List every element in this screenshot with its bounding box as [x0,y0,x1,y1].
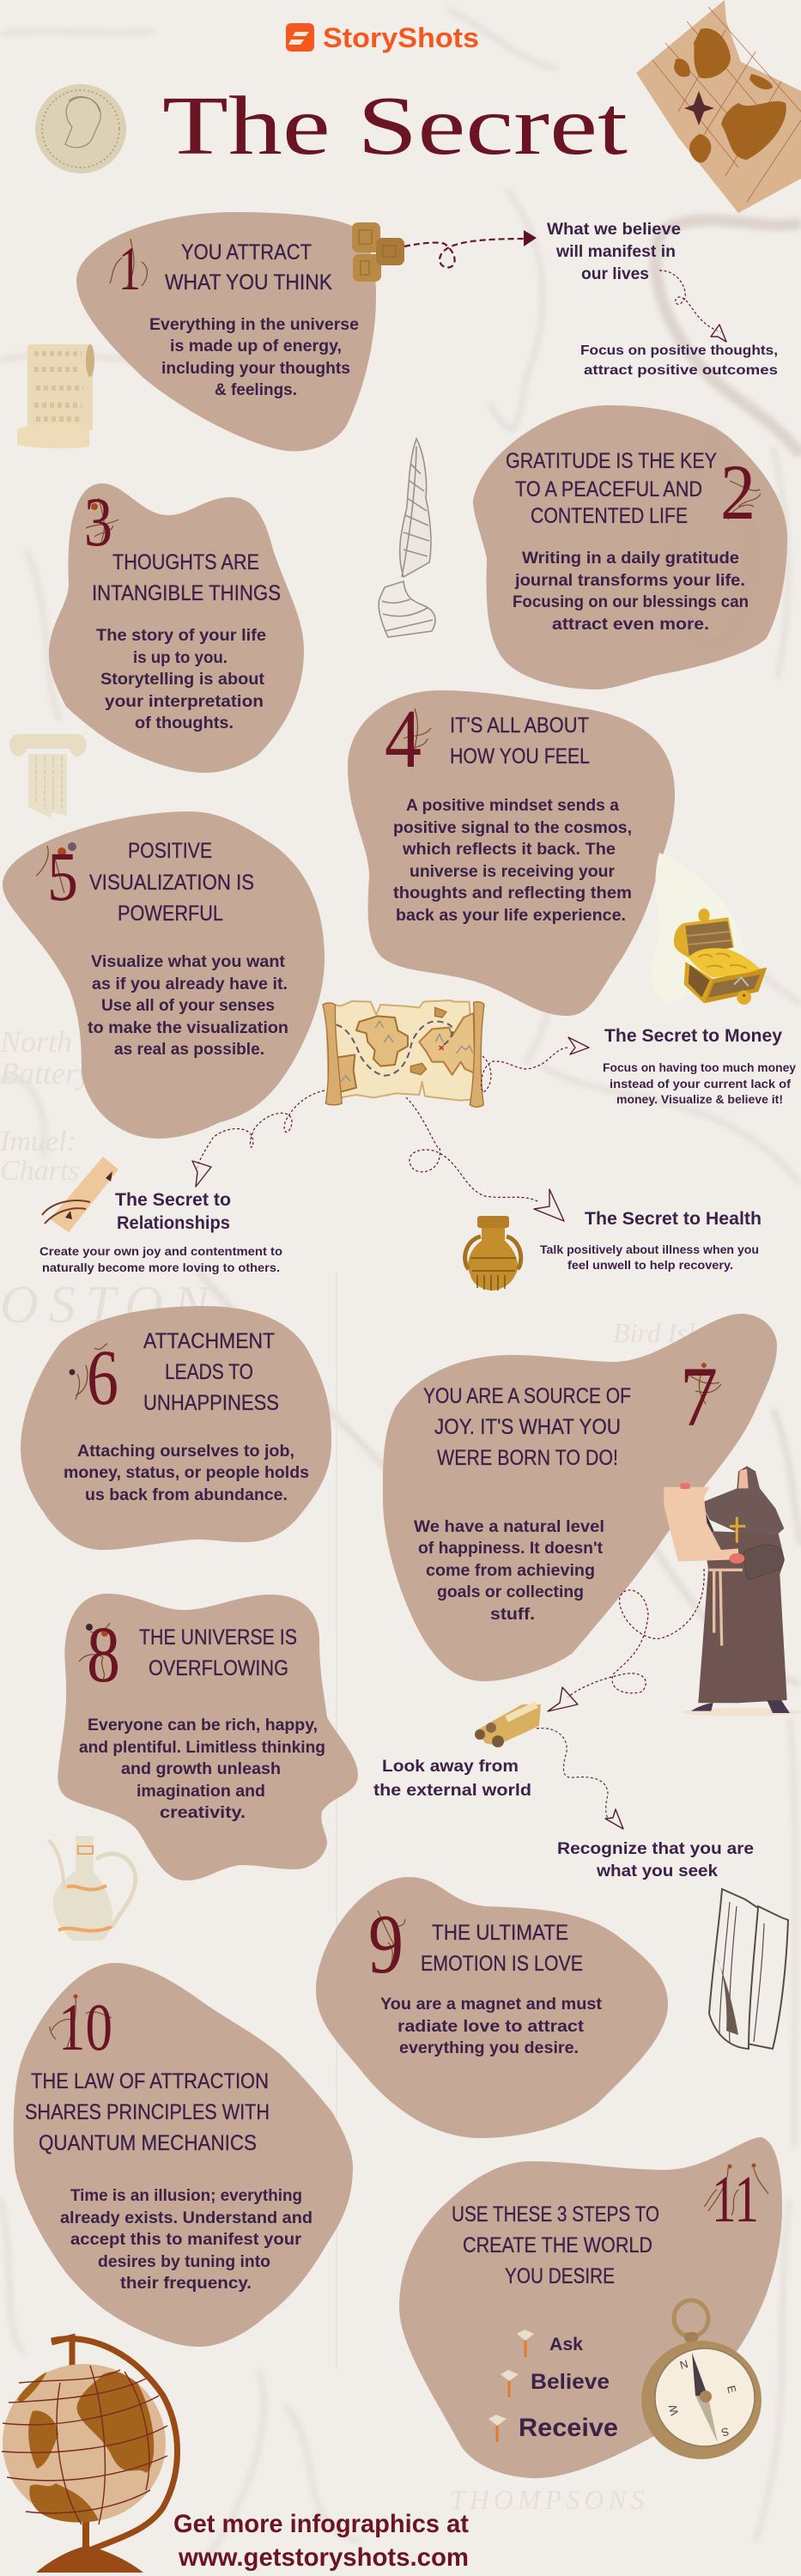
number 8: 8 [87,1611,120,1699]
step: believe: Believe [531,2370,610,2394]
callout: the secret to money: instead of your current lack of [610,1077,791,1091]
body 1: is made up of energy, [170,337,342,355]
body 1: including your thoughts [161,360,350,378]
number 10: 10 [58,1990,112,2064]
callout: the secret to relationships: Relationships [117,1213,230,1233]
heading 2 [506,449,717,528]
body 5: Visualize what you want [91,953,286,971]
body 3: Storytelling is about [100,671,265,689]
callout: what we believe: will manifest in [555,243,676,261]
heading 5: POWERFUL [118,902,223,926]
body 9: everything you desire. [399,2039,579,2057]
number 1: 1 [118,234,141,303]
body 10: accept this to manifest your [70,2231,302,2249]
text: Imuel: [0,1126,76,1157]
step: ask [517,2330,583,2357]
body 3: your interpretation [105,693,264,711]
heading 7: JOY. IT'S WHAT YOU [434,1415,621,1439]
number 5: 5 [47,837,78,915]
blob 9 [316,1877,668,2138]
icon: quill and inkpot [379,439,435,637]
callout: what we believe: What we believe [547,221,681,239]
heading 4 [450,714,590,769]
icon: broken column [9,734,87,818]
body 7: stuff. [490,1606,535,1624]
number 6: 6 [87,1334,118,1421]
heading 5: VISUALIZATION IS [89,871,254,895]
callout: the secret to relationships [39,1190,282,1274]
body 8: Everyone can be rich, happy, [88,1716,318,1735]
heading 9 [421,1921,583,1976]
body 5: as if you already have it. [92,975,288,993]
arrow: monk to scrolls [548,1569,704,1711]
body 10: desires by tuning into [98,2253,270,2271]
body 2: Focusing on our blessings can [513,593,749,611]
panel 4: it's all about how you feel [348,690,675,1016]
icon: old world map [636,0,801,213]
body 10: already exists. Understand and [60,2209,313,2227]
body 2: journal transforms your life. [514,572,745,590]
heading 11: CREATE THE WORLD [463,2233,652,2257]
body 3: The story of your life [96,627,266,645]
footer call to action: www.getstoryshots.com [178,2543,469,2572]
callout: the secret to relationships: Create your own joy and contentment to [39,1244,282,1258]
callout: recognize [557,1839,754,1880]
number 4: 4 [385,693,422,786]
body 10: Time is an illusion; everything [70,2187,302,2205]
arrow: scrolls to recognize [537,1728,623,1829]
heading 6: LEADS TO [165,1360,253,1384]
heading 9: THE ULTIMATE [432,1921,568,1945]
body 8 [79,1716,325,1822]
icon: compass [641,2300,762,2459]
callout: focus on positive thoughts: Focus on positive thoughts, [580,343,778,358]
icon: compass: N [678,2357,689,2372]
arrow: belief to focus [659,270,726,342]
heading 7 [423,1384,631,1470]
panel 11: three steps [399,2137,782,2478]
body 4: A positive mindset sends a [406,797,619,815]
body 6: Attaching ourselves to job, [77,1443,294,1461]
callout: focus on positive thoughts: attract positive outcomes [584,363,778,378]
callout: look away [373,1757,531,1800]
heading 6: UNHAPPINESS [143,1391,279,1415]
blob 5 [3,811,325,1139]
text: Bird Island [613,1317,737,1348]
callout: the secret to health: feel unwell to help recovery. [567,1258,733,1272]
icon: compass: W [665,2403,681,2417]
body 3 [96,627,266,732]
icon: ceramic jug [48,1836,136,1941]
body 7: come from achieving [426,1562,595,1580]
callout: what we believe [547,221,681,283]
body 2 [513,550,749,634]
panel 1: you attract what you think [76,212,376,452]
body 7: goals or collecting [437,1583,584,1601]
callout: the secret to relationships: The Secret to [115,1190,231,1210]
arrow: map to health [406,1097,564,1221]
callout: the secret to health: Talk positively about illness when you [540,1242,759,1256]
blob 2 [473,405,787,690]
panel 2: gratitude [473,405,787,690]
heading 5 [89,839,254,926]
blob 8 [58,1594,358,1880]
body 7: of happiness. It doesn't [418,1540,604,1558]
figure: monk with scroll [664,1466,801,1716]
body 4: universe is receiving your [410,863,616,881]
text: THOMPSONS [450,2484,649,2515]
text: Battery [0,1056,91,1091]
footer call to action [173,2510,469,2572]
text: Charts [0,1155,80,1187]
body 1 [149,316,359,399]
footer call to action: Get more infographics at [173,2510,469,2538]
panel 5: positive visualization [3,811,325,1139]
heading 2: CONTENTED LIFE [531,504,688,528]
blob 6 [21,1306,331,1550]
number 3: 3 [84,483,112,561]
icon: books [709,1889,788,2049]
heading 9: EMOTION IS LOVE [421,1952,583,1976]
heading 11 [452,2202,659,2288]
callout: the secret to money [603,1026,796,1106]
body 1: & feelings. [215,381,297,399]
callout: what we believe: our lives [581,265,649,283]
body 5: to make the visualization [88,1019,288,1037]
icon: urn [465,1216,521,1291]
body 6: money, status, or people holds [64,1464,309,1482]
body 8: imagination and [137,1783,265,1801]
step: believe [501,2370,610,2397]
body 8: and growth unleash [121,1760,281,1778]
callout: the secret to relationships: naturally become more loving to others. [42,1261,280,1274]
heading 10 [25,2069,270,2155]
step: ask: Ask [549,2335,583,2354]
body 4: positive signal to the cosmos, [393,819,632,837]
heading 2: TO A PEACEFUL AND [515,477,702,501]
callout: the secret to money: The Secret to Money [604,1026,782,1046]
body 8: creativity. [160,1804,246,1822]
heading 5: POSITIVE [128,839,212,863]
body 5: as real as possible. [114,1041,264,1059]
panel 7: source of joy [383,1314,777,1681]
callout: focus on positive thoughts [580,343,778,378]
body 4 [393,797,632,925]
panel 6: attachment [21,1306,331,1550]
heading 7: YOU ARE A SOURCE OF [423,1384,631,1408]
heading 6 [143,1329,279,1415]
text: OSTON [0,1276,219,1334]
icon: rolled parchment [42,1157,118,1232]
number 5 [36,837,78,915]
title: The Secret [162,80,628,172]
icon: globe [2,2337,177,2573]
blob 7 [383,1314,777,1681]
icon: carved tablets [352,222,404,282]
panel 8: universe overflowing [58,1594,358,1880]
callout: the secret to health: The Secret to Health [585,1209,762,1229]
body 4: thoughts and reflecting them [393,884,632,902]
heading 1: WHAT YOU THINK [165,270,332,295]
heading 3: THOUGHTS ARE [112,550,259,574]
number 9: 9 [368,1898,404,1991]
icon: coin [35,84,126,173]
heading 1: YOU ATTRACT [181,240,312,264]
body 5 [88,953,288,1059]
heading 6: ATTACHMENT [143,1329,275,1353]
heading 3 [92,550,281,605]
panel 10: law of attraction [14,1963,353,2347]
body 10: their frequency. [120,2275,252,2293]
number 6 [69,1334,118,1421]
heading 8 [139,1625,297,1680]
icon: treasure chest [652,853,767,1005]
panel 9: ultimate emotion [316,1877,668,2138]
body 5: Use all of your senses [101,997,275,1015]
body 7: We have a natural level [414,1518,604,1536]
callout: recognize: what you seek [596,1862,718,1880]
arrow: map to relationships [192,1091,325,1187]
number 11: 11 [712,2162,759,2236]
heading 10: THE LAW OF ATTRACTION [31,2069,269,2093]
body 6: us back from abundance. [85,1486,288,1504]
body 2: Writing in a daily gratitude [522,550,739,568]
icon: compass: S [719,2425,731,2439]
body 9: You are a magnet and must [380,1996,603,2014]
heading 3: INTANGIBLE THINGS [92,581,281,605]
body 9 [380,1996,603,2057]
callout: the secret to health [540,1209,762,1272]
heading 1 [165,240,332,295]
blob 11 [399,2137,782,2478]
number 2: 2 [720,448,755,536]
heading 11: YOU DESIRE [505,2264,615,2288]
body 4: which reflects it back. The [402,841,616,859]
heading 4: IT'S ALL ABOUT [450,714,589,738]
body 4: back as your life experience. [396,907,626,925]
body 1: Everything in the universe [149,316,359,334]
panel 3: thoughts are intangible things [49,483,304,773]
arrow: tablets to belief [404,230,537,268]
logo: StoryShots: StoryShots [323,22,479,53]
body 3: of thoughts. [135,714,234,732]
blob 1 [76,212,376,452]
body 3: is up to you. [133,649,228,667]
heading 2: GRATITUDE IS THE KEY [506,449,717,473]
icon: rolled scrolls [475,1704,541,1747]
blob 10 [14,1963,353,2347]
step: receive: Receive [519,2414,618,2442]
body 8: and plentiful. Limitless thinking [79,1739,325,1757]
heading 10: QUANTUM MECHANICS [39,2131,257,2155]
body 9: radiate love to attract [397,2018,585,2036]
icon: compass: E [725,2384,739,2395]
callout: the secret to money: money. Visualize & believe it! [616,1092,783,1106]
body 2: attract even more. [552,616,709,634]
icon: hieroglyph scroll [17,344,94,448]
blob 3 [49,483,304,773]
icon: treasure map scroll [323,1000,484,1107]
heading 4: HOW YOU FEEL [450,744,590,769]
body 6 [64,1443,309,1504]
heading 11: USE THESE 3 STEPS TO [452,2202,659,2227]
heading 7: WERE BORN TO DO! [437,1446,618,1470]
callout: recognize: Recognize that you are [557,1839,754,1858]
number 7: 7 [680,1349,718,1444]
text: North [0,1024,72,1059]
body 10 [60,2187,313,2293]
body 7 [414,1518,604,1624]
arrow: map to money [482,1037,589,1092]
heading 8: OVERFLOWING [149,1656,288,1680]
heading 10: SHARES PRINCIPLES WITH [25,2100,270,2124]
heading 8: THE UNIVERSE IS [139,1625,297,1649]
blob 4 [348,690,675,1016]
callout: the secret to money: Focus on having too much money [603,1060,796,1074]
callout: look away: the external world [373,1781,531,1800]
callout: look away: Look away from [382,1757,519,1776]
